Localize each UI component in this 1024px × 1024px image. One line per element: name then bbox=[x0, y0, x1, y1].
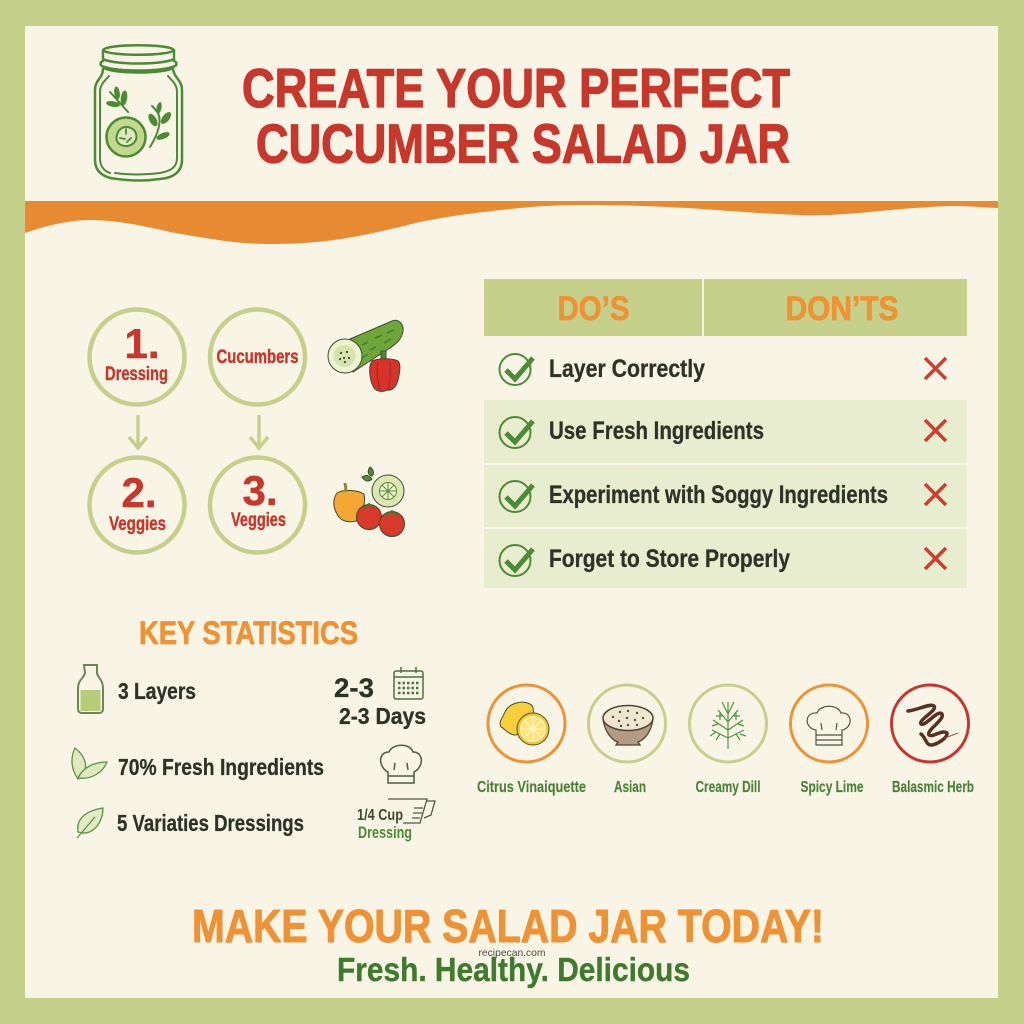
icon: cucumber and red pepper bbox=[328, 320, 403, 391]
step 1 circle: dressing bbox=[90, 310, 184, 404]
step circle: cucumbers: Cucumbers bbox=[216, 347, 298, 368]
step 3 circle: veggies: 3. bbox=[242, 467, 278, 514]
title: CUCUMBER SALAD JAR bbox=[256, 112, 790, 174]
variety: spicy lime bbox=[790, 685, 868, 796]
row: forget to store properly bbox=[500, 545, 946, 576]
icon: pepper, cucumber slice and tomatoes bbox=[334, 467, 404, 536]
panel: layer steps bbox=[90, 310, 305, 552]
stat: dressings: 5 Variaties Dressings bbox=[117, 810, 304, 836]
row: experiment with soggy ingredients: Experiment with Soggy Ingredients bbox=[549, 481, 888, 509]
variety: creamy dill bbox=[690, 685, 766, 796]
orange wave banner bbox=[25, 201, 998, 244]
call to action: MAKE YOUR SALAD JAR TODAY! bbox=[192, 900, 824, 952]
icon: leaf bbox=[77, 808, 103, 838]
panel: key statistics bbox=[72, 665, 435, 842]
stat: dressing label: Dressing bbox=[358, 823, 412, 842]
icon: bottle bbox=[78, 665, 103, 713]
variety: balsamic herb: Balasmic Herb bbox=[892, 779, 974, 796]
step 1 circle: dressing: 1. bbox=[124, 320, 160, 367]
arrow: step 1 to 2 bbox=[129, 415, 147, 448]
panel: dos and donts table bbox=[484, 279, 967, 588]
icon: mason jar bbox=[95, 45, 182, 181]
variety: balsamic herb bbox=[892, 685, 974, 796]
table header bbox=[484, 279, 967, 336]
icon: two leaves bbox=[72, 748, 107, 779]
variety: asian bbox=[588, 685, 666, 796]
title: CREATE YOUR PERFECT bbox=[242, 57, 790, 119]
variety: asian: Asian bbox=[614, 779, 646, 796]
table header: DO’S bbox=[558, 290, 630, 328]
variety: spicy lime: Spicy Lime bbox=[800, 779, 864, 796]
step circle: cucumbers bbox=[210, 310, 305, 404]
icon: measuring cup bbox=[388, 799, 435, 823]
step 2 circle: veggies: Veggies bbox=[109, 514, 166, 535]
watermark: recipecan.com bbox=[478, 947, 546, 959]
row: use fresh ingredients bbox=[500, 417, 946, 448]
step 3 circle: veggies: Veggies bbox=[231, 510, 286, 531]
stat: 2-3 days: 2-3 Days bbox=[339, 703, 426, 729]
step 3 circle: veggies bbox=[210, 458, 305, 552]
stat: quarter cup: 1/4 Cup bbox=[357, 807, 403, 824]
row: forget to store properly: Forget to Store Properly bbox=[549, 545, 790, 573]
stat: 3 layers: 3 Layers bbox=[118, 678, 196, 704]
stat: fresh ingredients: 70% Fresh Ingredients bbox=[118, 754, 324, 780]
stat: 2-3 number: 2-3 bbox=[334, 673, 374, 703]
icon: calendar bbox=[394, 667, 423, 699]
icon: chef hat bbox=[381, 745, 421, 783]
table header: DON’TS bbox=[786, 290, 898, 328]
step 1 circle: dressing: Dressing bbox=[105, 364, 168, 385]
variety: creamy dill: Creamy Dill bbox=[696, 779, 760, 796]
variety: citrus vinaigrette: Citrus Vinaiquette bbox=[477, 779, 586, 796]
title bbox=[242, 57, 790, 174]
tagline: Fresh. Healthy. Delicious bbox=[337, 951, 690, 988]
heading: key statistics: KEY STATISTICS bbox=[139, 615, 358, 651]
row: use fresh ingredients: Use Fresh Ingredients bbox=[549, 417, 764, 445]
row: layer correctly: Layer Correctly bbox=[549, 355, 705, 383]
variety: citrus vinaigrette bbox=[477, 685, 586, 796]
step 2 circle: veggies bbox=[90, 458, 184, 552]
arrow: cucumbers to 3 bbox=[250, 415, 268, 448]
panel: dressing varieties bbox=[477, 685, 974, 796]
row: layer correctly bbox=[500, 354, 946, 385]
step 2 circle: veggies: 2. bbox=[121, 469, 157, 516]
row backgrounds bbox=[484, 400, 967, 588]
